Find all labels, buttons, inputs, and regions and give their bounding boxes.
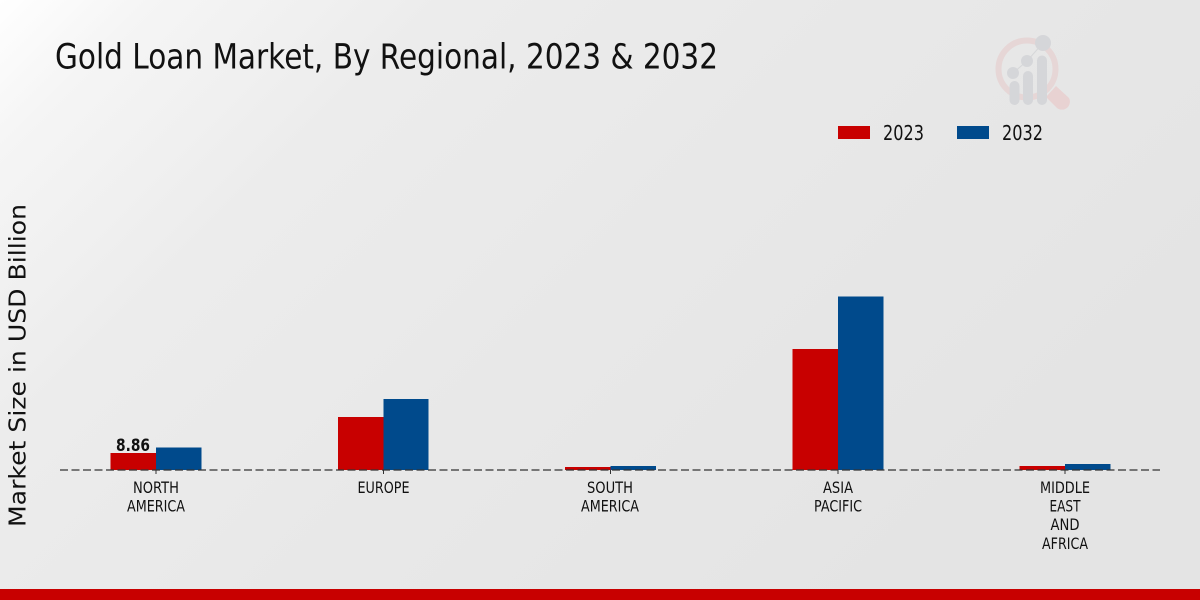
legend item: 2023: [838, 121, 924, 145]
title: Gold Loan Market, By Regional, 2023 & 2032: [55, 38, 718, 78]
x axis labels: [127, 478, 1090, 553]
legend item: 2032: 2032: [1002, 121, 1043, 145]
x axis baseline: [60, 469, 1160, 471]
bars: Middle East and Africa: [1020, 464, 1110, 470]
legend item: 2032: [957, 121, 1043, 145]
label: Europe: EUROPE: [358, 478, 410, 497]
bars: North America: [110, 448, 202, 470]
footer bar: [0, 589, 1200, 600]
label: Asia Pacific: [814, 478, 862, 516]
label: Asia Pacific: PACIFIC: [814, 496, 862, 516]
label: North America: [127, 478, 185, 516]
bars: Asia Pacific: [792, 296, 884, 470]
label: South America: [581, 478, 639, 516]
legend item: 2023: 2023: [883, 121, 924, 145]
label: Middle East and Africa: MIDDLE: [1040, 478, 1090, 497]
data label: 8.86: 8.86: [116, 436, 150, 455]
bars: Europe: [338, 399, 428, 470]
label: Middle East and Africa: EAST: [1050, 496, 1081, 516]
bars: South America: [565, 466, 656, 470]
legend: [838, 121, 1043, 145]
label: North America: NORTH: [133, 478, 179, 497]
label: Asia Pacific: ASIA: [823, 478, 853, 497]
label: Middle East and Africa: AND: [1050, 515, 1080, 534]
icon: watermark logo: [998, 35, 1070, 110]
label: North America: AMERICA: [127, 496, 185, 516]
label: Middle East and Africa: [1040, 478, 1090, 553]
label: South America: AMERICA: [581, 496, 639, 516]
label: Middle East and Africa: AFRICA: [1042, 534, 1088, 553]
y axis label: Market Size in USD Billion: [6, 204, 32, 527]
bar chart: [60, 296, 1160, 474]
label: South America: SOUTH: [587, 478, 633, 497]
